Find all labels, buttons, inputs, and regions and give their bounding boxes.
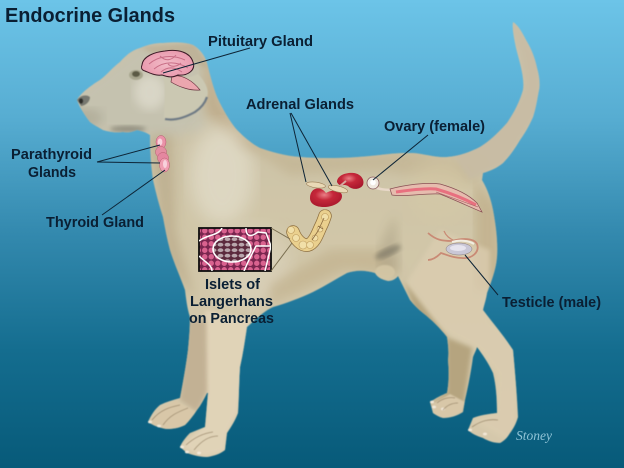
label: islets of Langerhans: Islets of bbox=[205, 277, 260, 293]
gland: pancreas bbox=[288, 214, 328, 249]
head shading bbox=[81, 44, 206, 132]
label: parathyroid glands: Parathyroid bbox=[11, 147, 92, 163]
dog body silhouette bbox=[77, 22, 540, 457]
paw toes bbox=[148, 401, 487, 454]
gland: brain and pituitary bbox=[141, 50, 200, 90]
nose bbox=[77, 95, 90, 106]
label: testicle: Testicle (male) bbox=[502, 295, 601, 311]
label: thyroid gland: Thyroid Gland bbox=[46, 215, 144, 231]
label: pituitary gland: Pituitary Gland bbox=[208, 34, 313, 50]
label: islets of Langerhans bbox=[189, 277, 274, 327]
gland: ovary and oviduct bbox=[367, 177, 482, 212]
dog illustration bbox=[67, 22, 540, 457]
label: adrenal glands: Adrenal Glands bbox=[246, 97, 354, 113]
gland: testicle bbox=[428, 231, 478, 260]
neck and body shading bbox=[150, 50, 500, 305]
ear shadow bbox=[165, 97, 207, 120]
artist signature: Stoney bbox=[516, 429, 553, 444]
title: Endocrine Glands bbox=[5, 5, 175, 27]
ear bbox=[163, 74, 208, 119]
label: parathyroid glands bbox=[11, 147, 92, 181]
label: parathyroid glands: Glands bbox=[28, 165, 76, 181]
inset: islets of Langerhans bbox=[199, 228, 271, 271]
label: islets of Langerhans: Langerhans bbox=[190, 294, 273, 310]
eye bbox=[129, 70, 143, 80]
leader lines bbox=[97, 48, 498, 295]
front leg shading bbox=[160, 312, 249, 457]
gland: thyroid and parathyroid bbox=[156, 136, 170, 172]
gland: kidneys and adrenals bbox=[306, 173, 364, 207]
label: islets of Langerhans: on Pancreas bbox=[189, 311, 274, 327]
tail shading bbox=[477, 146, 484, 150]
rear leg shading bbox=[404, 244, 517, 438]
label: ovary: Ovary (female) bbox=[384, 119, 485, 135]
